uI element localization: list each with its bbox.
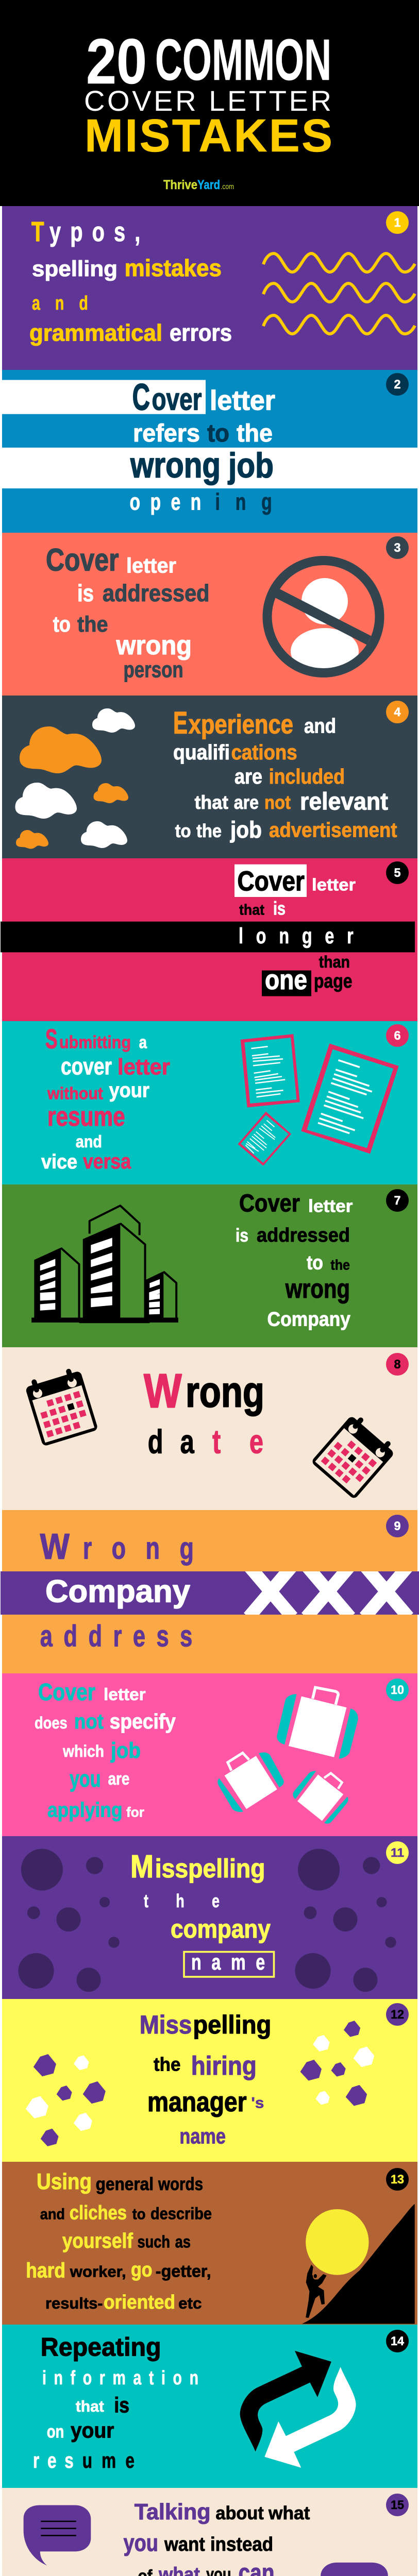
text: cliches: go xyxy=(131,2259,153,2281)
text: hiring manager: name xyxy=(179,2124,226,2148)
icon: office buildings xyxy=(31,1206,178,1323)
text: cliches: Using xyxy=(37,2169,92,2194)
panel: mistake 14 repeating resume xyxy=(2,2325,417,2488)
text: wrong person: person xyxy=(124,657,183,682)
text: cliches: cliches xyxy=(70,2202,127,2224)
text: wrong company: addressed xyxy=(257,1225,350,1246)
badge 13 xyxy=(386,2168,409,2191)
panel: mistake 15 talking about you xyxy=(2,2488,417,2576)
text: submitting: versa xyxy=(83,1149,131,1173)
text: typos: ypos, xyxy=(49,216,140,247)
badge 12 xyxy=(386,2003,409,2026)
text: repeating information: is xyxy=(114,2393,129,2417)
text: wrong company address: address xyxy=(40,1620,192,1653)
title xyxy=(84,26,332,162)
badge 8 xyxy=(386,1353,409,1376)
text: longer than one page: Cover xyxy=(237,866,305,897)
text: hiring manager: pelling xyxy=(193,2010,271,2039)
badge 11 xyxy=(386,1841,409,1864)
text: submitting: letter xyxy=(118,1055,170,1080)
text: wrong date xyxy=(144,1364,264,1461)
badge 12: 12 xyxy=(391,2008,404,2022)
icon: scattered documents xyxy=(238,1034,399,1166)
text: submitting: a xyxy=(139,1033,147,1053)
text: talking about: you xyxy=(124,2530,158,2556)
text: wrong company address xyxy=(40,1526,194,1653)
text: cliches: -getter, xyxy=(156,2261,211,2280)
badge 1: 1 xyxy=(394,216,401,230)
text: cliches: oriented xyxy=(104,2292,175,2313)
decorative dark circles xyxy=(18,1849,396,1992)
text: experience: relevant xyxy=(300,788,388,815)
text: wrong job: the xyxy=(237,420,273,447)
text: wrong company address: rong xyxy=(83,1531,194,1566)
text: cliches: yourself xyxy=(62,2229,133,2252)
text: cliches: results- xyxy=(45,2294,103,2312)
text: wrong company: letter xyxy=(308,1197,353,1216)
text: longer than one page: one xyxy=(265,964,307,995)
text: submitting: and xyxy=(76,1132,102,1151)
text: typos: mistakes xyxy=(125,255,222,281)
text: does not specify: not xyxy=(74,1709,104,1733)
text: submitting xyxy=(41,1024,170,1173)
text: misspelling company name xyxy=(130,1849,274,1977)
badge 6: 6 xyxy=(394,1029,401,1043)
panel: mistake 6 resume and cover letter xyxy=(2,1021,417,1184)
text: wrong company: the xyxy=(330,1257,350,1273)
text: wrong job: to xyxy=(207,420,229,447)
panel: mistake 4 irrelevant experience xyxy=(2,696,417,858)
text: does not specify: specify xyxy=(110,1709,176,1733)
text: does not specify: you xyxy=(70,1766,101,1792)
text: repeating information: ume xyxy=(82,2448,135,2472)
text: repeating information: on xyxy=(47,2421,64,2442)
text: does not specify: Cover xyxy=(38,1679,95,1705)
badge 3: 3 xyxy=(394,541,401,555)
badge 4 xyxy=(386,701,409,723)
icon: calendar left xyxy=(24,1366,98,1447)
badge 9 xyxy=(386,1515,409,1537)
text: typos: T xyxy=(31,216,44,247)
text: typos: errors xyxy=(170,319,232,346)
text: wrong person: the xyxy=(77,612,108,637)
text: does not specify: which xyxy=(62,1742,104,1760)
text: hiring manager: hiring xyxy=(191,2051,257,2080)
text: wrong job: refers xyxy=(133,420,200,447)
text: wrong date: W xyxy=(144,1364,182,1418)
text: experience: that xyxy=(195,792,228,813)
text: wrong job: ing xyxy=(215,489,272,515)
badge 2 xyxy=(386,373,409,396)
text: hiring manager: Miss xyxy=(140,2010,192,2039)
text: repeating information: your xyxy=(71,2418,114,2442)
badge 4: 4 xyxy=(394,705,401,719)
text: talking about: Talking xyxy=(135,2499,211,2524)
text: experience: included xyxy=(269,765,345,788)
text: wrong person: letter xyxy=(126,553,176,577)
text: does not specify: job xyxy=(110,1738,141,1763)
text: talking about: about xyxy=(215,2502,264,2523)
text: wrong person: addressed xyxy=(103,580,209,606)
panel: mistake 12 misspelling manager name xyxy=(2,1999,417,2162)
logo: ThriveYard xyxy=(163,178,234,192)
panel: mistake 5 too long xyxy=(1,858,417,1021)
text: submitting: without xyxy=(47,1083,103,1103)
text: talking about xyxy=(124,2499,310,2576)
text: misspelling company name: M xyxy=(130,1849,154,1885)
panel: header xyxy=(0,0,419,206)
text: experience: to xyxy=(175,820,191,841)
text: experience: E xyxy=(173,706,188,740)
text: longer than one page: that xyxy=(239,902,264,919)
badge 13: 13 xyxy=(391,2173,404,2187)
text: repeating information: that xyxy=(76,2397,104,2415)
text: does not specify: letter xyxy=(104,1685,146,1704)
badge 8: 8 xyxy=(394,1358,401,1371)
text: longer than one page: longer xyxy=(239,924,354,948)
text: wrong date: te xyxy=(212,1423,263,1461)
icon: hexagons xyxy=(26,2021,374,2146)
icon: speech bubble right xyxy=(321,2563,388,2576)
badge 5 xyxy=(386,861,409,884)
text: cliches: general xyxy=(96,2174,154,2194)
text: submitting: resume xyxy=(47,1101,125,1132)
text: longer than one page: is xyxy=(273,898,286,919)
badge 15: 15 xyxy=(391,2498,404,2512)
panel: mistake 13 general words and cliches xyxy=(2,2162,417,2325)
text: wrong job xyxy=(130,377,275,515)
panel: mistake 10 job not specified xyxy=(2,1673,417,1836)
text: talking about: want xyxy=(164,2534,205,2555)
icon: no person sign xyxy=(267,561,379,674)
text: hiring manager: 's xyxy=(251,2095,264,2111)
text: cliches: such xyxy=(137,2232,170,2251)
text: longer than one page: page xyxy=(314,971,353,992)
text: wrong person: to xyxy=(53,612,71,637)
icon: calendar right xyxy=(311,1411,398,1500)
text: cliches xyxy=(26,2169,212,2313)
panel: mistake 2 wrong job xyxy=(2,370,417,533)
text: experience: cations xyxy=(231,740,297,764)
title: COMMON xyxy=(155,27,331,92)
text: wrong person: wrong xyxy=(116,631,192,660)
badge 9: 9 xyxy=(394,1519,401,1533)
icon: speech bubble left xyxy=(24,2505,91,2566)
text: cliches: hard xyxy=(26,2259,65,2282)
text: repeating information xyxy=(33,2333,198,2472)
text: wrong company: Company xyxy=(267,1309,350,1330)
text: wrong job: wrong xyxy=(130,445,221,485)
text: hiring manager xyxy=(140,2010,271,2148)
badge 14: 14 xyxy=(391,2334,405,2348)
icon: figure pushing boulder uphill xyxy=(302,2204,415,2324)
icon: wavy underlines xyxy=(263,253,415,334)
text: hiring manager: the xyxy=(154,2054,180,2075)
text: does not specify xyxy=(35,1679,176,1822)
text: wrong person: is xyxy=(77,580,94,606)
text: misspelling company name: company xyxy=(171,1914,271,1943)
panel: mistake 9 wrong address xyxy=(1,1510,419,1673)
badge 5: 5 xyxy=(394,866,401,880)
text: wrong date: da xyxy=(148,1423,195,1461)
text: submitting: ubmitting xyxy=(59,1033,131,1053)
text: experience xyxy=(173,706,397,843)
text: wrong company: Cover xyxy=(239,1190,300,1217)
text: wrong company: wrong xyxy=(285,1274,350,1304)
text: submitting: cover xyxy=(61,1053,112,1080)
text: typos: grammatical xyxy=(29,320,162,346)
badge 3 xyxy=(386,536,409,559)
badge 14 xyxy=(386,2330,409,2352)
text: repeating information: res xyxy=(33,2448,74,2472)
text: wrong company xyxy=(236,1190,353,1330)
title: MISTAKES xyxy=(85,110,332,162)
panel: mistake 7 wrong company xyxy=(2,1184,417,1347)
text: does not specify: for xyxy=(126,1805,144,1820)
text: submitting: S xyxy=(45,1024,58,1055)
text: typos: spelling xyxy=(32,257,118,281)
badge 10: 10 xyxy=(391,1683,404,1697)
text: misspelling company name: isspelling xyxy=(155,1854,265,1883)
icon: clouds xyxy=(15,708,135,849)
text: longer than one page: letter xyxy=(312,875,356,894)
text: typos xyxy=(29,216,232,346)
text: experience: job xyxy=(230,817,262,843)
text: wrong job: C xyxy=(132,377,150,418)
panel: mistake 11 misspelling company name xyxy=(2,1836,417,1999)
badge 2: 2 xyxy=(394,378,401,392)
logo: ThriveYard: .com xyxy=(221,182,234,191)
text: wrong company address: W xyxy=(40,1526,70,1566)
text: typos: and xyxy=(32,293,88,314)
text: does not specify: are xyxy=(108,1769,130,1789)
text: misspelling company name: name xyxy=(191,1951,265,1975)
text: wrong job: job xyxy=(227,446,274,485)
text: cliches: etc xyxy=(178,2294,202,2312)
text: longer than one page: than xyxy=(319,953,350,971)
text: cliches: and xyxy=(40,2206,65,2223)
text: talking about: what xyxy=(268,2502,310,2523)
logo: ThriveYard: Thrive xyxy=(163,178,197,192)
text: talking about: instead xyxy=(210,2534,273,2555)
text: wrong job: letter xyxy=(210,385,275,416)
title: 20 xyxy=(86,26,147,97)
icon: repeat arrows xyxy=(240,2351,356,2468)
text: experience: xperience xyxy=(189,710,293,740)
text: experience: qualifi xyxy=(173,740,230,764)
text: wrong person xyxy=(46,543,209,682)
icon: three white Xs xyxy=(244,1571,413,1615)
text: cliches: as xyxy=(175,2232,191,2251)
badge 7 xyxy=(386,1189,409,1212)
text: experience: and xyxy=(304,715,336,738)
text: submitting: your xyxy=(109,1079,149,1102)
badge 1 xyxy=(386,211,409,234)
text: experience: not xyxy=(264,792,291,813)
text: wrong job: open xyxy=(130,489,201,515)
text: experience: are xyxy=(234,765,262,788)
text: wrong person: Cover xyxy=(46,543,119,578)
text: experience: advertisement xyxy=(269,819,397,842)
title: COVER LETTER xyxy=(84,84,331,117)
text: misspelling company name: the xyxy=(144,1890,220,1911)
text: wrong date: rong xyxy=(186,1367,264,1416)
text: cliches: describe xyxy=(150,2205,212,2223)
text: wrong company address: Company xyxy=(45,1574,190,1609)
badge 10 xyxy=(386,1679,409,1701)
text: hiring manager: manager xyxy=(147,2087,247,2117)
badge 7: 7 xyxy=(394,1194,401,1208)
text: repeating information: information xyxy=(42,2367,198,2389)
text: cliches: words xyxy=(158,2174,203,2194)
text: does not specify: does xyxy=(35,1714,68,1732)
text: cliches: worker, xyxy=(70,2262,126,2280)
icon: briefcases xyxy=(217,1687,358,1824)
text: wrong company: is xyxy=(236,1225,248,1246)
logo: ThriveYard: Yard xyxy=(197,178,220,192)
text: does not specify: applying xyxy=(47,1799,123,1822)
text: wrong company: to xyxy=(307,1252,323,1274)
text: cliches: to xyxy=(132,2206,146,2223)
text: repeating information: Repeating xyxy=(41,2333,161,2362)
text: longer than one page xyxy=(237,866,356,995)
text: experience: are xyxy=(234,792,259,813)
panel: mistake 1 typos xyxy=(2,206,417,370)
badge 15 xyxy=(386,2494,409,2516)
badge 6 xyxy=(386,1024,409,1047)
text: experience: the xyxy=(196,820,222,841)
panel: mistake 3 wrong person xyxy=(2,533,417,696)
text: wrong job: over xyxy=(152,382,202,417)
badge 11: 11 xyxy=(391,1846,404,1860)
panel: mistake 8 wrong date xyxy=(2,1347,417,1510)
text: submitting: vice xyxy=(41,1151,77,1173)
